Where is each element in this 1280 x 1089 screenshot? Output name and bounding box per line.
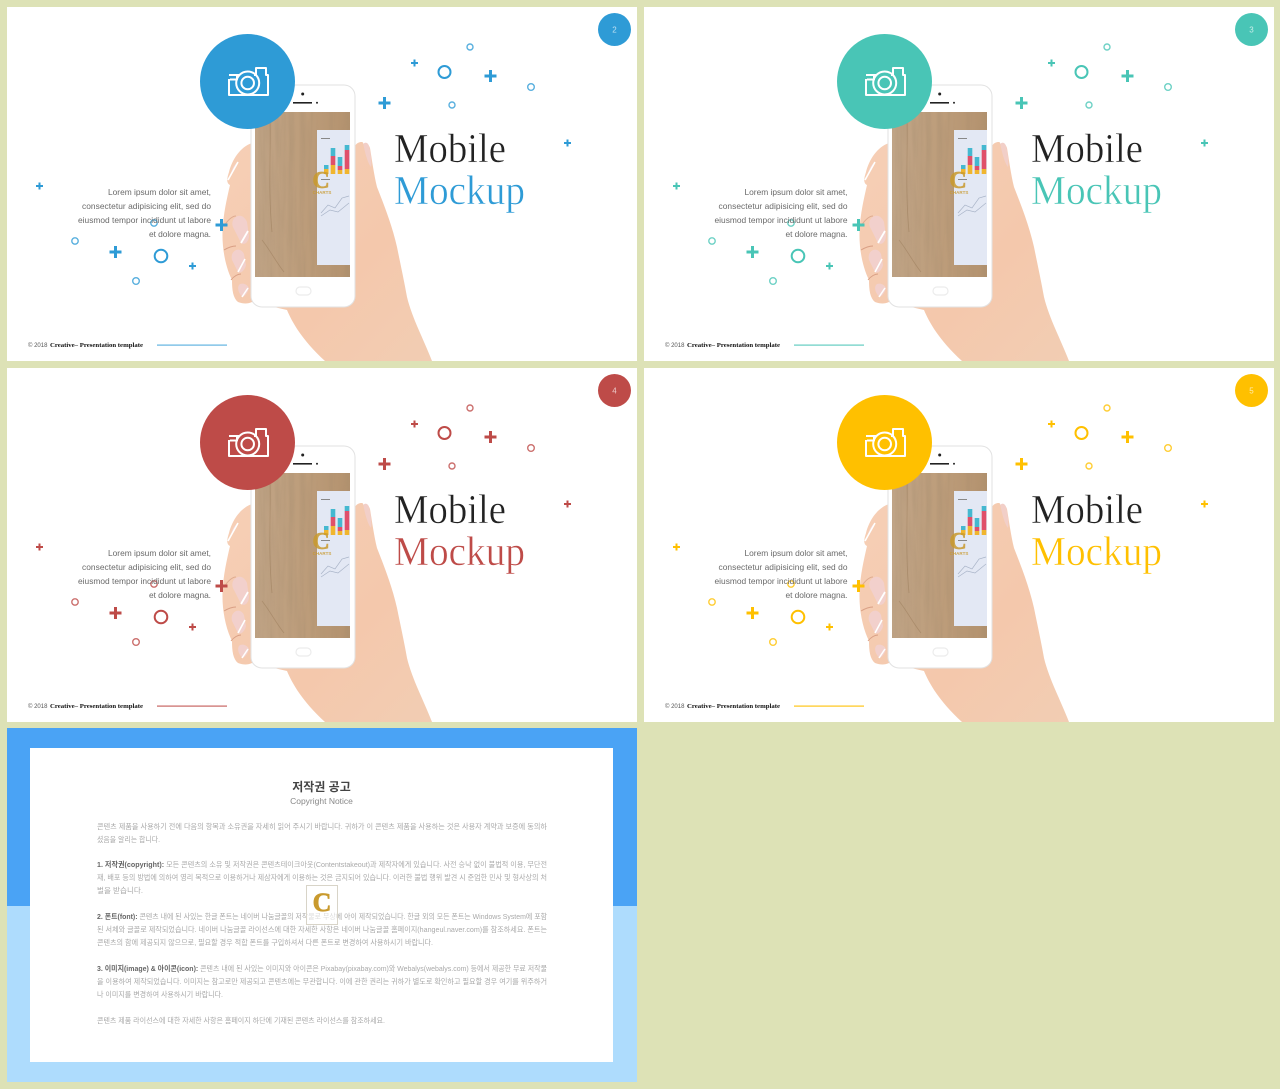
title <box>395 494 524 574</box>
notice text: 벌을 받습니다. <box>97 885 143 895</box>
notice text: 콘텐츠의 함에 제공되지 않으므로, 필요할 경우 적합 폰트를 구입하셔서 다른 폰트로 변경하여 사용하시기 바랍니다. <box>97 937 433 947</box>
notice text: 2. 폰트(font): 콘텐츠 내에 된 사있는 한글 폰트는 네이버 나눔글꼴의 저작물로 무상에 아이 제작되었습니다. 한글 외의 모든 폰트는 Windows System에 포함 <box>97 911 547 921</box>
notice text: 콘텐츠 제품을 사용하기 전에 다음의 항목과 소유권을 자세히 읽어 주시기 바랍니다. 귀하가 이 콘텐츠 제품을 사용하는 것은 사용자 계약과 보증에 동의하 <box>97 821 547 831</box>
phone watermark: C <box>312 529 330 555</box>
footer: © 2018 <box>28 703 48 710</box>
notice text <box>97 821 547 1025</box>
title: Mockup <box>394 528 525 574</box>
body text: et dolore magna. <box>786 229 848 239</box>
notice text: 1. 저작권(copyright): 모든 콘텐츠의 소유 및 저작권은 콘텐츠테이크아웃(Contentstakeout)과 제작자에게 있습니다. 사전 승낙 없이 불법적 이용, 무단전 <box>97 859 547 869</box>
body text: et dolore magna. <box>149 229 211 239</box>
notice text: 셨음을 알리는 합니다. <box>97 835 160 844</box>
body text: eiusmod tempor incididunt ut labore <box>714 576 848 586</box>
page number: 5 <box>1249 386 1254 396</box>
notice text: 3. 이미지(image) & 아이콘(icon): 콘텐츠 내에 된 사있는 이미지와 아이콘은 Pixabay(pixabay.com)와 Webalys(webalys.com) 등에서 제공한 무료 저작물 <box>97 963 547 973</box>
footer: © 2018 <box>665 703 685 710</box>
phone watermark: C <box>949 529 967 555</box>
body text <box>714 187 848 239</box>
page number <box>598 13 631 46</box>
panel: slide 5 yellow <box>644 368 1274 722</box>
notice text: 나 이미지를 변경하여 사용하시기 바랍니다. <box>97 989 223 999</box>
notice text: 재, 배포 등의 방법에 의하여 영리 목적으로 이용하거나 제삼자에게 이용하는 것은 금지되어 있습니다. 이러한 불법 행위 발견 시 준엄한 민사 및 형사상의 처 <box>97 872 547 882</box>
phone watermark: CHARTS <box>313 551 331 556</box>
footer <box>665 342 864 349</box>
phone watermark: CHARTS <box>950 190 968 195</box>
heading: 저작권 공고 <box>292 779 351 794</box>
notice text: 된 서체와 글꼴로 제작되었습니다. 네이버 나눔글꼴 라이선스에 대한 자세한 사항은 네이버 나눔글꼴 홈페이지(hangeul.naver.com)를 참조하세요. 폰트는 <box>97 924 547 934</box>
body text: consectetur adipisicing elit, sed do <box>718 201 848 211</box>
heading <box>290 779 353 806</box>
phone watermark: C <box>312 168 330 194</box>
notice text: 을 이용하여 제작되었습니다. 이미지는 참고로만 제공되고 콘텐츠에는 무관합니다. 이에 관한 권리는 귀하가 별도로 확인하고 필요할 경우 여기를 위주하거 <box>97 976 547 986</box>
body text: eiusmod tempor incididunt ut labore <box>714 215 848 225</box>
body text: Lorem ipsum dolor sit amet, <box>744 548 848 558</box>
title: Mobile <box>1031 486 1143 532</box>
footer <box>28 342 227 349</box>
body text: et dolore magna. <box>149 590 211 600</box>
phone in hand <box>859 446 1069 722</box>
footer: Creative– Presentation template <box>687 703 780 710</box>
page number <box>1235 374 1268 407</box>
footer <box>665 703 864 710</box>
panel: slide 2 blue <box>7 7 637 361</box>
icon: camera badge <box>200 395 295 490</box>
body text: Lorem ipsum dolor sit amet, <box>108 548 211 558</box>
body text <box>78 548 211 600</box>
panel: slide 4 red <box>7 368 637 722</box>
notice text: 콘텐츠 제품 라이선스에 대한 자세한 사항은 홈페이지 하단에 기재된 콘텐츠 라이선스를 참조하세요. <box>97 1015 385 1025</box>
page number <box>598 374 631 407</box>
watermark logo: C <box>313 888 331 917</box>
title: Mockup <box>1031 528 1162 574</box>
page number: 4 <box>612 386 617 396</box>
icon: camera badge <box>837 395 932 490</box>
panel: copyright notice <box>7 728 637 1082</box>
plus and circle decorations <box>36 44 571 284</box>
title: Mockup <box>1031 167 1162 213</box>
title <box>395 134 524 213</box>
body text: consectetur adipisicing elit, sed do <box>82 201 211 211</box>
footer: Creative– Presentation template <box>687 342 780 349</box>
phone in hand <box>859 85 1069 361</box>
phone watermark: CHARTS <box>950 551 968 556</box>
plus and circle decorations <box>36 405 571 645</box>
title: Mobile <box>1031 125 1143 171</box>
title: Mobile <box>394 125 506 171</box>
phone watermark: C <box>949 168 967 194</box>
plus and circle decorations <box>673 44 1208 284</box>
page number: 2 <box>612 26 617 34</box>
title: Mockup <box>394 167 525 213</box>
footer: Creative– Presentation template <box>50 342 143 349</box>
body text: Lorem ipsum dolor sit amet, <box>744 187 848 197</box>
footer <box>28 703 227 710</box>
body text: eiusmod tempor incididunt ut labore <box>78 576 211 586</box>
body text: consectetur adipisicing elit, sed do <box>718 562 848 572</box>
watermark logo <box>306 886 338 924</box>
title: Mobile <box>394 486 506 532</box>
body text <box>78 187 211 239</box>
title <box>1032 134 1160 213</box>
body text: eiusmod tempor incididunt ut labore <box>78 215 211 225</box>
icon: camera badge <box>837 34 932 129</box>
body text <box>714 548 848 600</box>
title <box>1032 494 1160 574</box>
icon: camera badge <box>200 34 295 129</box>
phone in hand <box>222 85 432 361</box>
body text: consectetur adipisicing elit, sed do <box>82 562 211 572</box>
footer: © 2018 <box>28 342 48 349</box>
phone watermark: CHARTS <box>313 190 331 195</box>
plus and circle decorations <box>673 405 1208 645</box>
page number <box>1235 13 1268 46</box>
footer: Creative– Presentation template <box>50 703 143 710</box>
panel: slide 3 teal <box>644 7 1274 361</box>
body text: Lorem ipsum dolor sit amet, <box>108 187 211 197</box>
page number: 3 <box>1249 26 1254 34</box>
heading: Copyright Notice <box>290 796 353 806</box>
body text: et dolore magna. <box>786 590 848 600</box>
phone in hand <box>222 446 432 722</box>
footer: © 2018 <box>665 342 685 349</box>
